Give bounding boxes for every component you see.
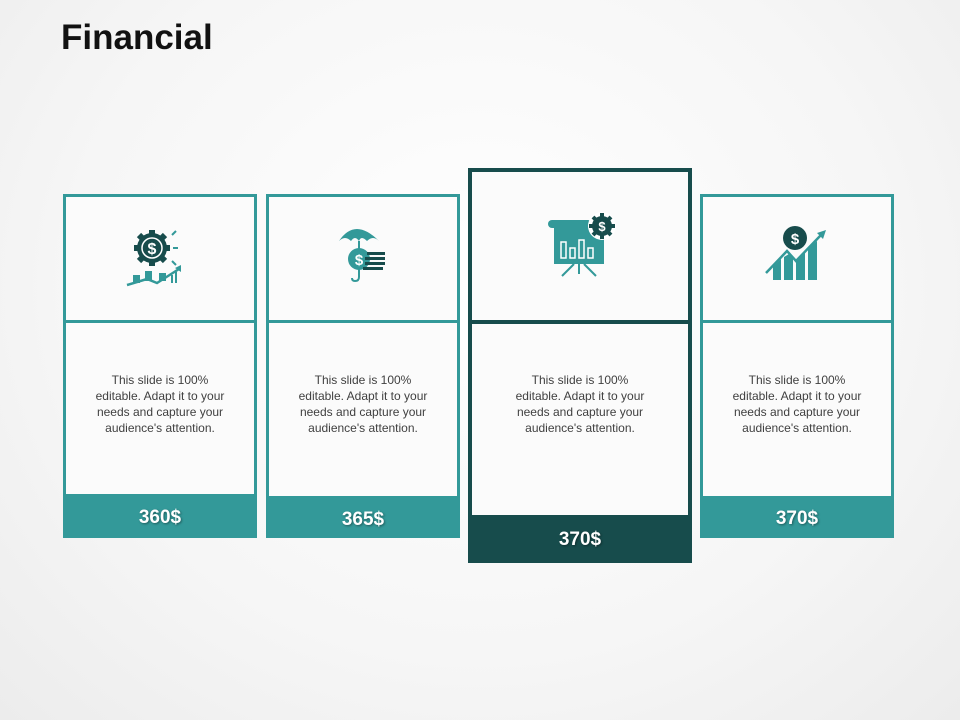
- icon: presentation board with dollar gear: [548, 213, 615, 277]
- panel: card 2: [266, 194, 460, 538]
- icon: presentation board with dollar gear: $: [598, 219, 606, 234]
- text 1: audience's attention.: [105, 421, 215, 435]
- text 1: needs and capture your: [97, 405, 223, 419]
- text 3: This slide is 100%: [532, 373, 628, 387]
- text 4: audience's attention.: [742, 421, 852, 435]
- text 4: [733, 373, 862, 435]
- text 4: This slide is 100%: [749, 373, 845, 387]
- value 4: [700, 496, 894, 538]
- panel: card 3 highlighted: [468, 168, 692, 563]
- value 2: 365$: [342, 509, 384, 530]
- icon box 2: [269, 197, 457, 323]
- text 1: [96, 373, 224, 435]
- value 2: [266, 496, 460, 538]
- text 2: needs and capture your: [300, 405, 426, 419]
- icon: umbrella dollar coins: $: [355, 252, 364, 269]
- icon box 4: [703, 197, 891, 323]
- value 3: [468, 515, 692, 563]
- text 2: editable. Adapt it to your: [299, 389, 427, 403]
- icon: umbrella dollar coins: [339, 229, 385, 282]
- text 3: audience's attention.: [525, 421, 635, 435]
- text 3: editable. Adapt it to your: [516, 389, 644, 403]
- text 3: [516, 373, 644, 435]
- text 2: This slide is 100%: [315, 373, 411, 387]
- value 4: 370$: [776, 508, 818, 529]
- text 3: needs and capture your: [517, 405, 643, 419]
- icon: gear dollar with growth chart: [126, 230, 181, 286]
- value 1: [63, 494, 257, 538]
- text 4: editable. Adapt it to your: [733, 389, 861, 403]
- panel: card 1: [63, 194, 257, 538]
- text 2: audience's attention.: [308, 421, 418, 435]
- icon box 1: [66, 197, 254, 323]
- title: Financial: [61, 18, 213, 57]
- icon: gear dollar with growth chart: $: [148, 241, 157, 258]
- icon box 3: [472, 172, 688, 324]
- icon: dollar growth bars: [765, 226, 826, 280]
- text 1: editable. Adapt it to your: [96, 389, 224, 403]
- text 1: This slide is 100%: [112, 373, 208, 387]
- text 4: needs and capture your: [734, 405, 860, 419]
- text 2: [299, 373, 428, 435]
- panel: card 4: [700, 194, 894, 538]
- icon: dollar growth bars: $: [791, 231, 800, 248]
- value 3: 370$: [559, 529, 601, 550]
- value 1: 360$: [139, 507, 181, 528]
